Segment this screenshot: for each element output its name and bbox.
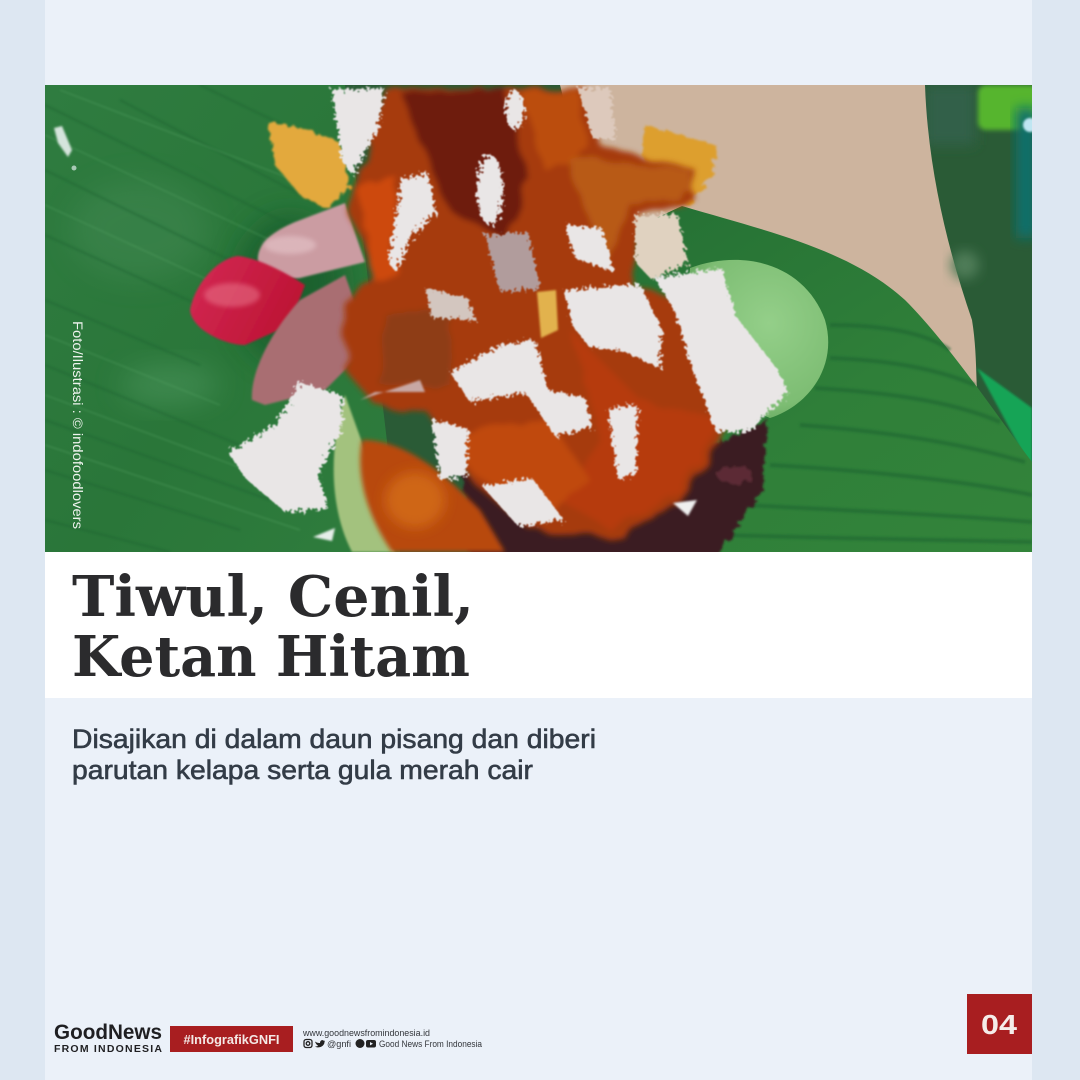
photo backdrop xyxy=(345,85,1032,552)
food: syrup highlights xyxy=(313,290,697,541)
footer logo: GoodNews From Indonesia: GoodNews xyxy=(54,1021,162,1044)
food: brown sugar syrup xyxy=(345,88,725,538)
food: black sticky rice xyxy=(462,420,768,560)
hashtag badge xyxy=(170,1026,293,1052)
icon: instagram xyxy=(304,1040,312,1048)
photo: tiwul, cenil and black sticky rice on banana leaf xyxy=(45,85,1038,560)
description: Disajikan di dalam daun pisang dan diberi xyxy=(72,724,596,754)
footer website and social media: @gnfi xyxy=(327,1039,351,1049)
title xyxy=(72,564,474,690)
food: leaf cup and syrup xyxy=(334,395,505,552)
icon: twitter xyxy=(315,1040,325,1047)
footer website and social media: Good News From Indonesia xyxy=(379,1039,482,1049)
footer logo: GoodNews From Indonesia: FROM INDONESIA xyxy=(54,1043,162,1055)
icon: facebook xyxy=(356,1039,364,1048)
description: parutan kelapa serta gula merah cair xyxy=(72,755,533,785)
page number xyxy=(967,994,1032,1054)
food: grated coconut xyxy=(228,88,788,526)
food: cenil pieces xyxy=(190,203,370,405)
footer logo: GoodNews From Indonesia xyxy=(54,1021,162,1055)
banana leaf, right side xyxy=(628,206,1032,552)
photo credit: Foto/Ilustrasi : © indofoodlovers xyxy=(70,321,85,529)
icon: youtube xyxy=(366,1040,376,1048)
page number: 04 xyxy=(981,1009,1017,1040)
footer website and social media xyxy=(302,1028,482,1049)
food: green ball xyxy=(680,260,828,418)
hashtag badge: #InfografikGNFI xyxy=(184,1033,280,1047)
footer website and social media: www.goodnewsfromindonesia.id xyxy=(302,1028,430,1038)
title band xyxy=(45,552,1032,698)
food: tiwul yellow xyxy=(268,122,716,210)
description xyxy=(72,724,596,785)
banana leaf, left side xyxy=(45,85,400,552)
title: Ketan Hitam xyxy=(72,624,470,690)
title: Tiwul, Cenil, xyxy=(72,564,474,630)
